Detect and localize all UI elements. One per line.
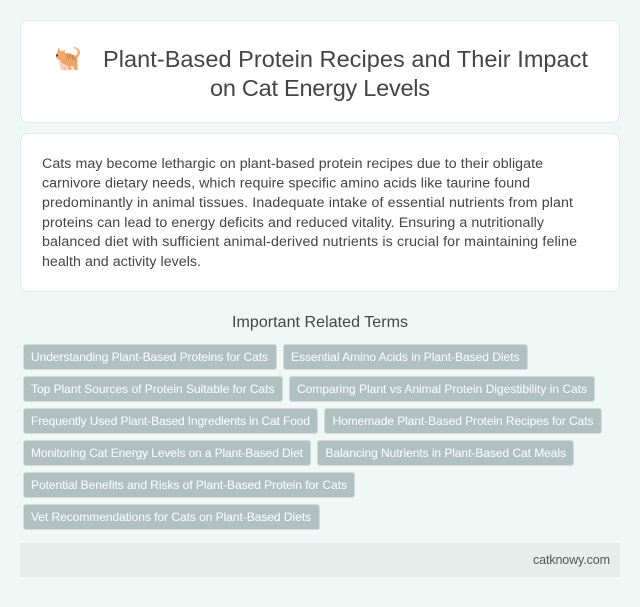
footer source: catknowy.com bbox=[533, 553, 610, 567]
summary text bbox=[42, 156, 577, 270]
summary text: proteins can lead to energy deficits and reduced vitality. Ensuring a nutritionally bbox=[42, 215, 545, 231]
tag: Top Plant Sources of Protein Suitable for Cats bbox=[31, 382, 274, 396]
tag: Balancing Nutrients in Plant-Based Cat Meals bbox=[326, 446, 566, 460]
summary text: health and activity levels. bbox=[42, 254, 201, 270]
tag bbox=[24, 408, 318, 434]
footer bar bbox=[20, 543, 620, 577]
title: on Cat Energy Levels bbox=[210, 75, 430, 101]
title bbox=[103, 46, 588, 101]
tag: Homemade Plant-Based Protein Recipes for Cats bbox=[332, 414, 594, 428]
summary text: predominantly in animal tissues. Inadequate intake of essential nutrients from plant bbox=[42, 195, 573, 211]
title: Plant-Based Protein Recipes and Their Impact bbox=[103, 46, 588, 72]
tag bbox=[284, 344, 528, 370]
tag: Monitoring Cat Energy Levels on a Plant-Based Diet bbox=[31, 446, 304, 460]
tag bbox=[24, 376, 282, 402]
summary text: Cats may become lethargic on plant-based protein recipes due to their obligate bbox=[42, 156, 543, 172]
tag bbox=[24, 504, 320, 530]
tag: Essential Amino Acids in Plant-Based Diets bbox=[291, 350, 520, 364]
tag: Comparing Plant vs Animal Protein Digestibility in Cats bbox=[297, 382, 587, 396]
tag bbox=[24, 344, 276, 370]
icon: cat bbox=[56, 47, 80, 70]
tag bbox=[290, 376, 594, 402]
tag list bbox=[24, 344, 602, 530]
heading: related terms: Important Related Terms bbox=[232, 314, 408, 331]
tag bbox=[318, 440, 574, 466]
tag: Frequently Used Plant-Based Ingredients in Cat Food bbox=[31, 414, 310, 428]
summary text: carnivore dietary needs, which require specific amino acids like taurine found bbox=[42, 176, 530, 192]
summary text: balanced diet with sufficient animal-derived nutrients is crucial for maintaining feline bbox=[42, 234, 577, 250]
tag: Understanding Plant-Based Proteins for Cats bbox=[31, 350, 268, 364]
tag bbox=[24, 472, 354, 498]
tag bbox=[24, 440, 310, 466]
panel: title card bbox=[20, 20, 620, 122]
tag bbox=[324, 408, 602, 434]
tag: Potential Benefits and Risks of Plant-Based Protein for Cats bbox=[31, 478, 347, 492]
tag: Vet Recommendations for Cats on Plant-Based Diets bbox=[31, 510, 311, 524]
panel: summary card bbox=[20, 134, 620, 292]
